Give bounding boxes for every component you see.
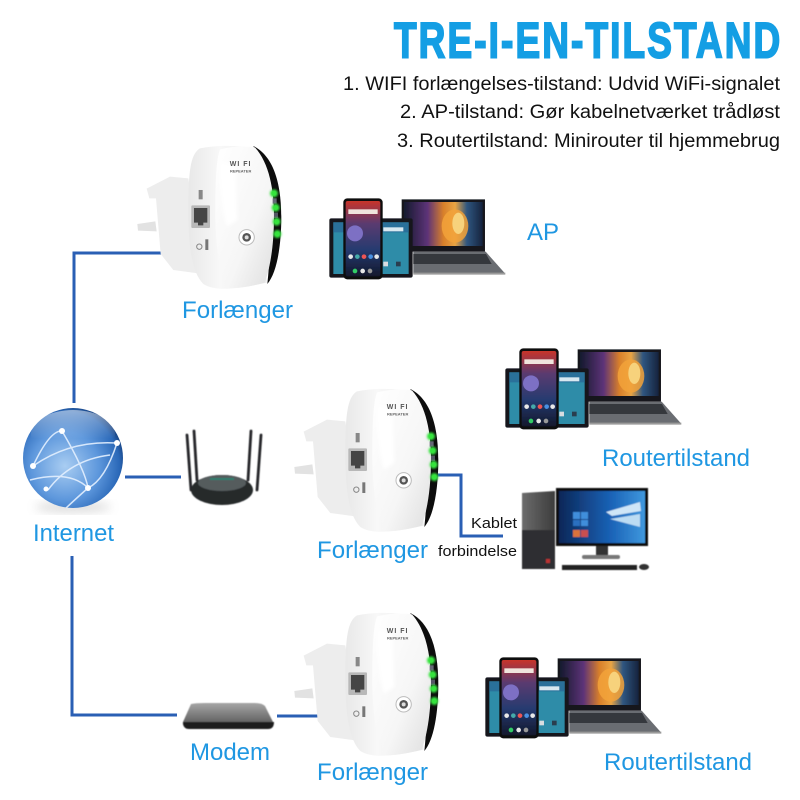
label: Kablet forbindelse: Kablet bbox=[471, 515, 518, 532]
connector: extender 2 to PC bbox=[437, 475, 503, 536]
icon: extender 3 bbox=[294, 613, 438, 756]
label: Routertilstand 2: Routertilstand bbox=[604, 749, 752, 776]
label: Forlænger 2: Forlænger bbox=[317, 537, 428, 564]
label: Kablet forbindelse bbox=[438, 515, 518, 560]
icon: devices router mode bbox=[505, 348, 681, 429]
title: TRE-I-EN-TILSTAND bbox=[394, 13, 780, 69]
label: Forlænger 1: Forlænger bbox=[182, 297, 293, 324]
mode list: 2. AP-tilstand: Gør kabelnetværket trådløst bbox=[400, 102, 781, 123]
icon: modem bbox=[183, 703, 274, 729]
label: Kablet forbindelse: forbindelse bbox=[438, 543, 517, 560]
icon: extender 2 bbox=[294, 389, 438, 532]
mode list: 1. WIFI forlængelses-tilstand: Udvid WiFi-signalet bbox=[343, 74, 781, 95]
connector: Internet to router bbox=[125, 476, 181, 478]
label: Modem: Modem bbox=[190, 739, 270, 766]
label: AP: AP bbox=[527, 219, 559, 246]
mode list: 3. Routertilstand: Minirouter til hjemmebrug bbox=[397, 131, 780, 152]
label: Routertilstand 1: Routertilstand bbox=[602, 445, 750, 472]
label: Internet: Internet bbox=[33, 520, 114, 547]
icon: router bbox=[187, 431, 261, 505]
connector: modem to extender 3 bbox=[277, 714, 320, 718]
icon: desktop PC bbox=[522, 488, 649, 570]
connector: Internet to extender 1 bbox=[74, 253, 161, 403]
mode list bbox=[343, 74, 781, 152]
icon: globe bbox=[23, 408, 123, 512]
label: Forlænger 3: Forlænger bbox=[317, 759, 428, 786]
icon: extender 1 bbox=[137, 146, 281, 289]
connector: Internet to modem bbox=[72, 556, 177, 715]
icon: devices AP bbox=[329, 198, 505, 279]
icon: devices bottom bbox=[485, 657, 661, 738]
